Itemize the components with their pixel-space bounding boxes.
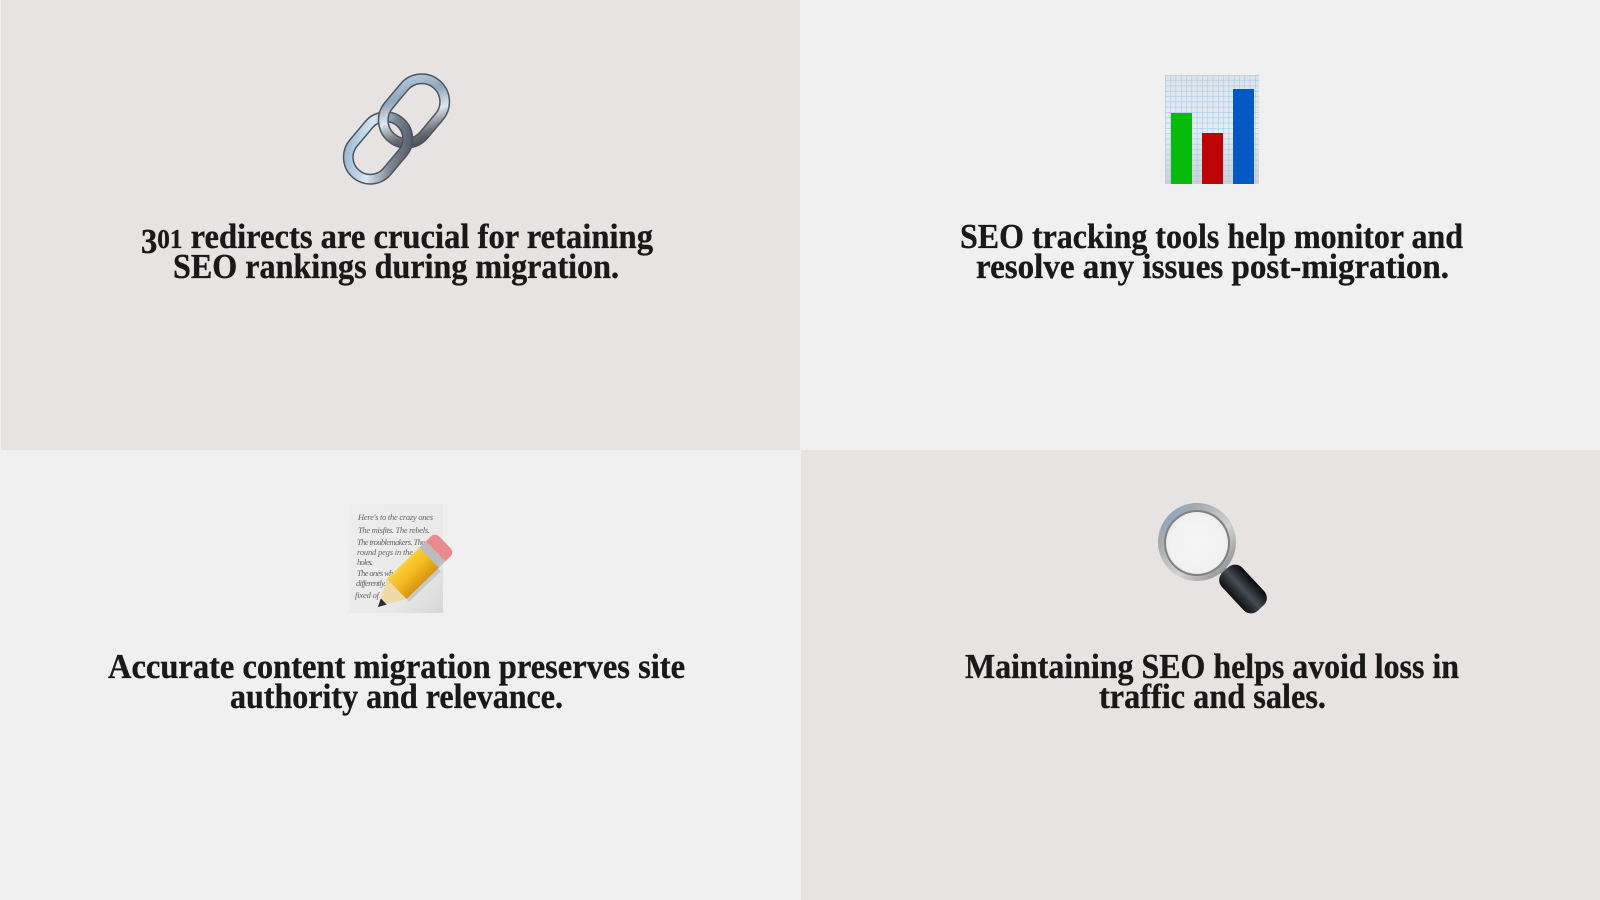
icon: memo and pencil: Here's to the crazy ones — [357, 512, 434, 522]
heading: maintaining SEO — [965, 647, 1459, 716]
panel: content migration — [0, 450, 800, 900]
icon: memo and pencil: The troublemakers. The — [357, 537, 425, 547]
heading: SEO tracking tools: resolve any issues post-migration. — [976, 247, 1449, 286]
heading: SEO tracking tools — [960, 217, 1463, 286]
icon: magnifying glass — [1158, 503, 1271, 618]
heading: 301 redirects: SEO rankings during migration. — [173, 247, 619, 286]
heading: content migration: authority and relevance. — [230, 677, 563, 716]
panel: SEO tracking tools — [800, 0, 1600, 450]
heading: maintaining SEO: Maintaining SEO helps avoid loss in — [965, 647, 1459, 686]
panel: maintaining SEO — [801, 450, 1600, 900]
icon: memo and pencil: holes. — [357, 557, 373, 567]
icon: bar chart — [1165, 75, 1259, 184]
icon: memo and pencil: The ones who — [357, 568, 397, 578]
heading: content migration: Accurate content migration preserves site — [108, 647, 685, 686]
icon: memo and pencil: round pegs in the — [357, 547, 413, 557]
icon: chain link — [342, 73, 450, 185]
icon: memo and pencil — [349, 504, 457, 620]
icon: memo and pencil: differently. — [356, 578, 386, 588]
icon: memo and pencil: fixed of — [355, 590, 381, 600]
heading: SEO tracking tools: SEO tracking tools help monitor and — [960, 217, 1463, 256]
heading: 301 redirects — [141, 217, 653, 286]
panel: 301 redirects — [1, 0, 800, 450]
heading: 301 redirects: redirects are crucial for retaining — [191, 217, 688, 256]
heading: 301 redirects: 01 — [157, 224, 182, 254]
heading: 301 redirects: 3 — [141, 222, 157, 261]
icon: memo and pencil: The misfits. The rebels. — [358, 525, 430, 535]
heading: maintaining SEO: traffic and sales. — [1099, 677, 1326, 716]
heading: content migration — [108, 647, 685, 716]
